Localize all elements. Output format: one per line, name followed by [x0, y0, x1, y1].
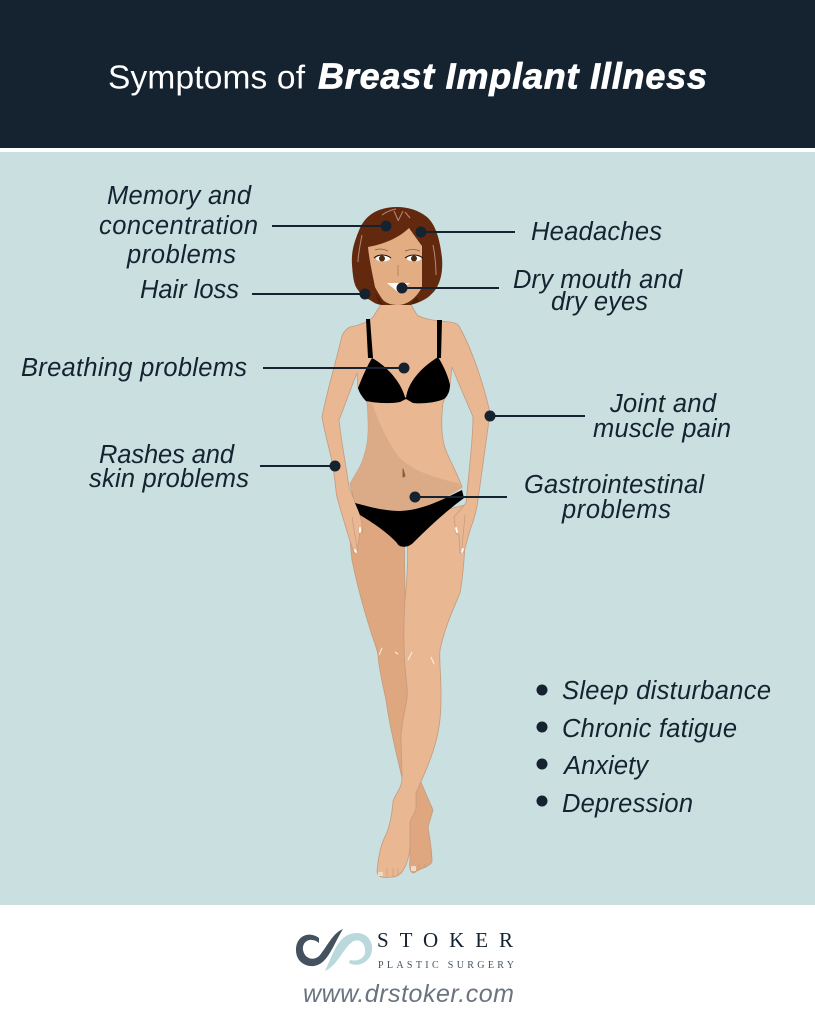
- mouth: [387, 283, 410, 292]
- hair shadows: [375, 293, 420, 305]
- callout: breathing problems: [21, 354, 410, 382]
- torso shadow: [350, 403, 462, 513]
- panel: symptoms background: [0, 152, 815, 905]
- title: Breast Implant Illness: [318, 56, 707, 96]
- callout: headaches: [416, 218, 662, 246]
- callout: breathing problems: Breathing problems: [21, 354, 247, 382]
- eyes: [374, 249, 423, 262]
- face: [368, 228, 422, 305]
- callout: dry mouth and dry eyes: [396, 266, 683, 316]
- list: other symptoms: Sleep disturbance: [562, 677, 771, 705]
- callout: memory and concentration: [99, 182, 392, 269]
- callout: memory and concentration: concentration: [99, 212, 258, 240]
- logo wordmark: [377, 928, 514, 971]
- list: other symptoms: Anxiety: [562, 752, 650, 780]
- nose: [397, 265, 399, 276]
- callout: gastrointestinal problems: Gastrointestinal: [524, 471, 705, 499]
- callout: hair loss: Hair loss: [140, 276, 239, 304]
- fingernails: [355, 528, 463, 552]
- callout: rashes and skin problems: Rashes and: [99, 441, 235, 469]
- callout: dry mouth and dry eyes: Dry mouth and: [513, 266, 683, 294]
- logo wordmark: STOKER: [377, 928, 513, 952]
- navel: [403, 469, 405, 477]
- callout: memory and concentration: Memory and: [107, 182, 252, 210]
- callout: rashes and skin problems: [89, 441, 340, 493]
- logo mark: [296, 929, 372, 971]
- hair highlights: [358, 209, 436, 275]
- title: [108, 56, 707, 96]
- panties: [355, 490, 464, 547]
- figure: woman: [322, 207, 490, 877]
- torso and arms: [322, 303, 490, 553]
- callout: headaches: Headaches: [531, 218, 662, 246]
- callout: hair loss: [140, 276, 370, 304]
- website: www.drstoker.com: [303, 980, 514, 1008]
- callout: rashes and skin problems: skin problems: [89, 465, 249, 493]
- finger lines: [352, 515, 465, 548]
- callout: dry mouth and dry eyes: dry eyes: [551, 288, 648, 316]
- callout: gastrointestinal problems: problems: [561, 496, 671, 524]
- callout: joint and muscle pain: [484, 390, 731, 443]
- callout: memory and concentration: problems: [126, 241, 236, 269]
- bra: [358, 319, 450, 403]
- list: other symptoms: Chronic fatigue: [562, 715, 737, 743]
- callout: gastrointestinal problems: [410, 471, 705, 524]
- callout: joint and muscle pain: muscle pain: [593, 415, 731, 443]
- front leg: [377, 505, 465, 877]
- hair: [352, 207, 442, 305]
- back leg: [350, 510, 433, 873]
- toes: [387, 864, 425, 877]
- logo wordmark: PLASTIC SURGERY: [378, 960, 514, 971]
- callout: joint and muscle pain: Joint and: [609, 390, 717, 418]
- header band: [0, 0, 815, 148]
- list: other symptoms: [536, 677, 771, 818]
- list: other symptoms: Depression: [562, 790, 693, 818]
- title: Symptoms of: [108, 60, 306, 96]
- knee highlights: [379, 648, 434, 664]
